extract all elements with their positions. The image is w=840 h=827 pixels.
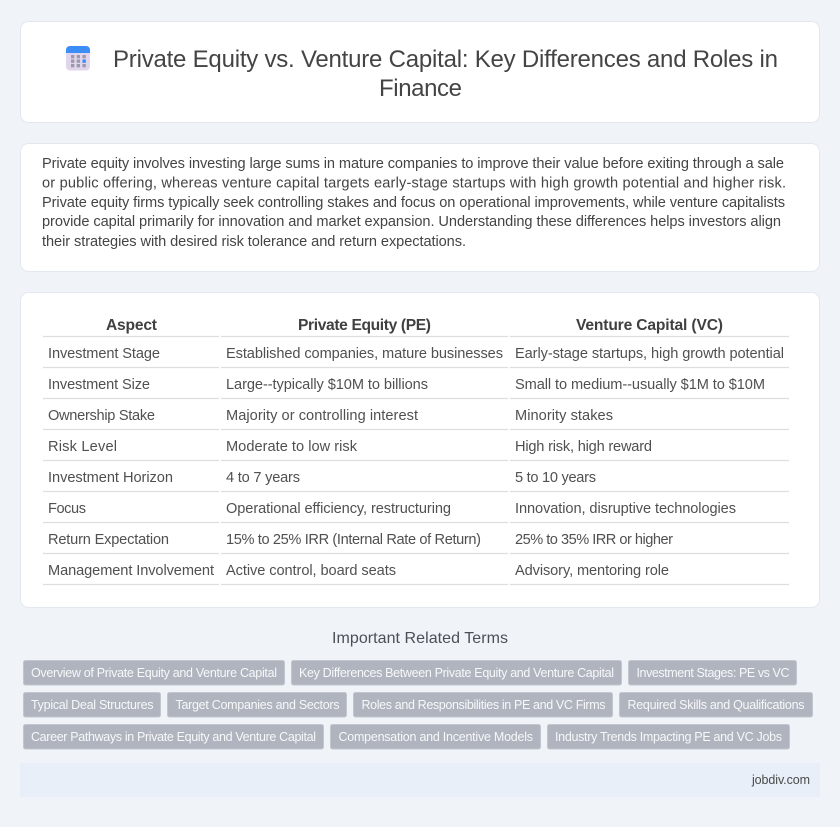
tag: [620, 692, 812, 717]
tag: Roles and Responsibilities in PE and VC Firms: [362, 698, 606, 712]
row: investment horizon: Investment Horizon: [48, 470, 173, 486]
row: ownership stake: Ownership Stake: [48, 408, 155, 424]
row: focus: Operational efficiency, restructuring: [226, 501, 451, 517]
tag: [354, 692, 612, 717]
row: ownership stake: Minority stakes: [515, 408, 613, 424]
footer: jobdiv.com: [751, 773, 810, 787]
table header: Private Equity (PE): [298, 317, 431, 334]
row: investment stage: [48, 346, 784, 362]
row: risk level: Risk Level: [48, 439, 117, 455]
row: return expectation: 15% to 25% IRR (Internal Rate of Return): [226, 532, 481, 548]
footer: [20, 763, 820, 797]
table header: Aspect: [106, 317, 157, 334]
row: investment stage: Established companies, mature businesses: [226, 346, 503, 362]
tag: Overview of Private Equity and Venture Capital: [31, 666, 277, 680]
row: focus: Innovation, disruptive technologies: [515, 501, 736, 517]
tag: [24, 692, 160, 717]
panel: summary paragraph: or public offering, whereas venture capital targets early-stage startups with high growth potential and higher risk.: [42, 176, 786, 192]
panel: summary paragraph: Private equity firms typically seek controlling stakes and focus on operational improvements, while venture capitalists: [42, 195, 785, 211]
tag: Industry Trends Impacting PE and VC Jobs: [555, 730, 782, 744]
row: return expectation: Return Expectation: [48, 532, 169, 548]
tag: [330, 724, 540, 749]
tag: [628, 660, 796, 685]
row: return expectation: 25% to 35% IRR or higher: [515, 532, 673, 548]
row: risk level: Moderate to low risk: [226, 439, 358, 455]
tag: Investment Stages: PE vs VC: [636, 666, 790, 680]
row: investment size: Small to medium--usually $1M to $10M: [515, 377, 765, 393]
title: Private Equity vs. Venture Capital: Key Differences and Roles in: [113, 46, 778, 73]
tag: [24, 724, 324, 749]
tag: Compensation and Incentive Models: [338, 730, 533, 744]
row: investment horizon: [48, 470, 596, 486]
row: management involvement: [48, 563, 669, 579]
related terms tags: [24, 660, 812, 749]
tag: Career Pathways in Private Equity and Venture Capital: [31, 730, 316, 744]
heading: important related terms: Important Related Terms: [332, 630, 508, 647]
header panel: [20, 22, 820, 122]
row: ownership stake: [48, 408, 613, 424]
panel: summary paragraph: their strategies with desired risk tolerance and return expectations.: [42, 234, 466, 250]
tag: [168, 692, 346, 717]
title: Finance: [379, 75, 462, 102]
row: investment horizon: 4 to 7 years: [226, 470, 300, 486]
row: focus: [48, 501, 736, 517]
row: management involvement: Advisory, mentoring role: [515, 563, 669, 579]
panel: comparison table: [20, 292, 820, 608]
row: risk level: [48, 439, 652, 455]
panel: summary paragraph: [20, 144, 820, 272]
icon: calendar: [66, 46, 90, 70]
row: risk level: High risk, high reward: [515, 439, 652, 455]
row: return expectation: [48, 532, 673, 548]
row: management involvement: Active control, board seats: [226, 563, 396, 579]
tag: Target Companies and Sectors: [176, 698, 340, 712]
row: investment size: [48, 377, 765, 393]
row: focus: Focus: [48, 501, 86, 517]
row: investment horizon: 5 to 10 years: [515, 470, 596, 486]
tag: Typical Deal Structures: [31, 698, 154, 712]
row: investment stage: Investment Stage: [48, 346, 160, 362]
tag: [292, 660, 622, 685]
row: management involvement: Management Involvement: [48, 563, 214, 579]
row: investment size: Large--typically $10M to billions: [226, 377, 428, 393]
title: [113, 46, 778, 102]
tag: [24, 660, 284, 685]
panel: summary paragraph: provide capital primarily for innovation and market expansion. Understanding these differences helps investors align: [42, 214, 781, 230]
tag: Key Differences Between Private Equity and Venture Capital: [299, 666, 614, 680]
row: investment size: Investment Size: [48, 377, 150, 393]
tag: Required Skills and Qualifications: [628, 698, 804, 712]
table header: Venture Capital (VC): [576, 317, 723, 334]
row: ownership stake: Majority or controlling interest: [226, 408, 418, 424]
table header: [106, 317, 723, 334]
panel: summary paragraph: Private equity involves investing large sums in mature companies to improve their value before exiting through a sale: [42, 156, 784, 172]
row: investment stage: Early-stage startups, high growth potential: [515, 346, 784, 362]
tag: [548, 724, 790, 749]
